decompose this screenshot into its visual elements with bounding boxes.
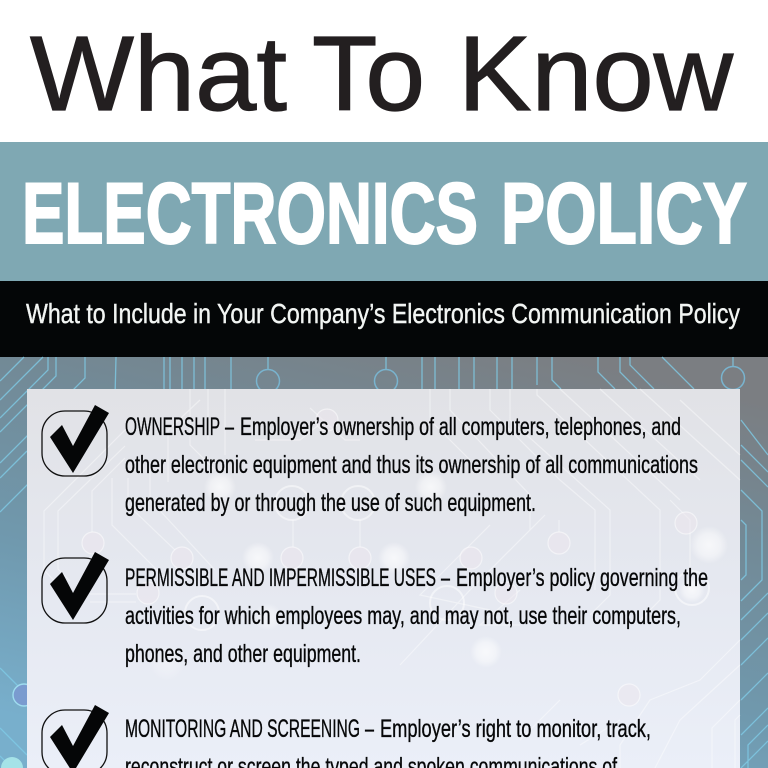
text block: permissible uses: – [441,564,450,592]
node: left edge circles [13,684,35,706]
text block: monitoring and screening [125,715,651,768]
title: To [312,15,425,133]
text block: permissible uses: PERMISSIBLE AND IMPERMISSIBLE USES [125,564,436,592]
text block: monitoring and screening: Employer’s right to monitor, track, [380,715,651,743]
icon: checkbox 2 [42,552,109,623]
circuit board background [0,357,768,768]
icon: checkbox 1 [42,405,109,476]
text block: ownership [125,413,698,517]
text block: permissible uses: phones, and other equipment. [125,640,361,668]
text block: monitoring and screening: MONITORING AND SCREENING [125,715,360,743]
text block: ownership: OWNERSHIP [125,413,220,441]
text block: permissible uses [125,564,708,668]
text block: ownership: generated by or through the use of such equipment. [125,489,536,517]
icon: checkbox 3 [42,705,109,768]
title: What [30,15,287,133]
banner: electronics policy [0,142,768,281]
banner: electronics policy: ELECTRONICS [22,166,478,262]
title: Know [458,15,733,133]
text block: monitoring and screening: – [365,715,374,743]
subtitle bar [0,281,768,357]
panel: translucent content card [27,389,740,768]
text block: ownership: – [225,413,234,441]
